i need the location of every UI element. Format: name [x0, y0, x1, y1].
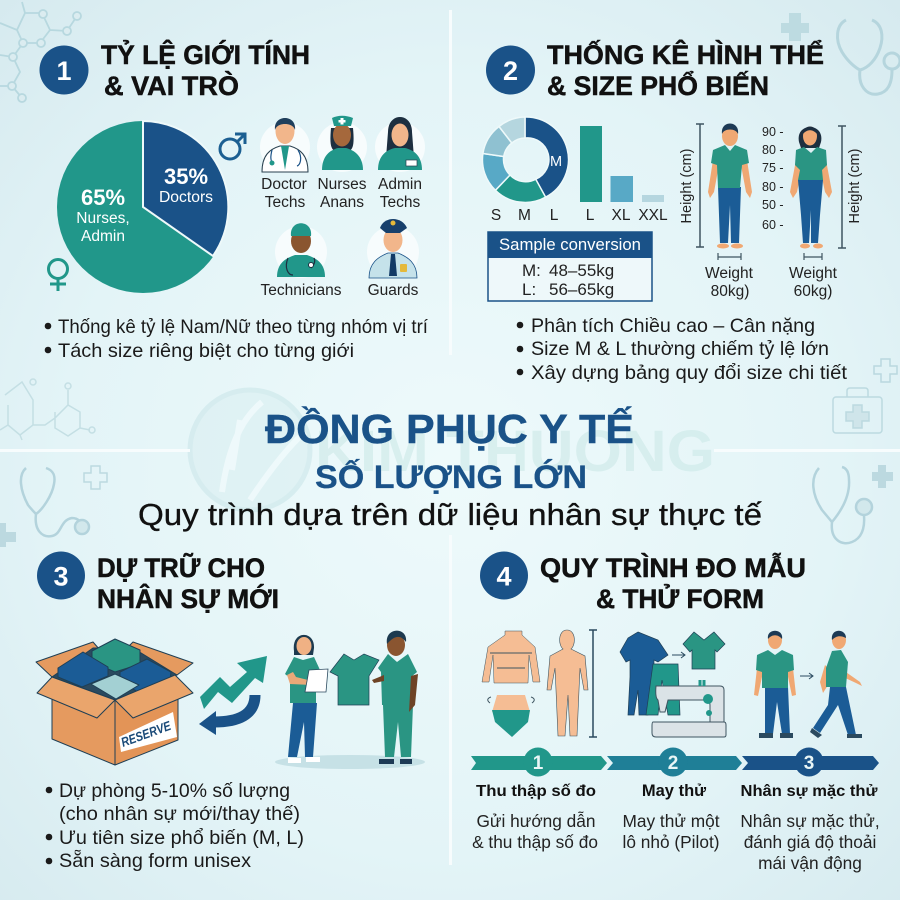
avatar: admin — [375, 117, 425, 211]
donut labels: M — [518, 207, 531, 224]
scale ticks: 50 - — [762, 198, 784, 212]
step 3 text: Nhân sự mặc thử, — [740, 811, 880, 831]
step 2 text: May thử — [642, 782, 706, 800]
scale ticks: 75 - — [762, 161, 784, 175]
donut labels — [491, 207, 559, 224]
bar chart — [580, 126, 668, 224]
avatar: nurse — [317, 116, 367, 211]
badge 1 — [40, 46, 88, 94]
panel 3: reserve for new staff — [36, 552, 425, 872]
bullet list 3: (cho nhân sự mới/thay thế) — [59, 803, 300, 825]
decoration: stethoscope right — [813, 467, 872, 543]
step 2 text: May thử một — [622, 811, 720, 831]
decoration: molecule middle left — [0, 379, 95, 440]
center title block — [138, 406, 762, 532]
heading 2: & SIZE PHỔ BIẾN — [547, 71, 769, 101]
badge 2 — [486, 46, 535, 94]
bar chart: XXL — [638, 207, 668, 224]
bullet list 3 — [46, 780, 304, 872]
sample conversion table: Sample conversion — [499, 235, 641, 254]
pie chart: 35% — [164, 164, 208, 189]
bullet list 3: Dự phòng 5-10% số lượng — [59, 780, 290, 802]
process arrow steps: 3 — [804, 753, 814, 774]
watermark logo: KIM THUONG — [315, 419, 715, 484]
decoration: cross right — [872, 465, 893, 488]
bullet list 2: Xây dựng bảng quy đổi size chi tiết — [531, 362, 848, 384]
arrow: green growth — [200, 656, 267, 709]
avatar: admin: Admin — [378, 176, 422, 193]
decoration: crosses left — [0, 466, 107, 547]
badge 3: 3 — [53, 562, 69, 592]
center title block: SỐ LƯỢNG LỚN — [315, 459, 587, 495]
scale ticks: 60 - — [762, 218, 784, 232]
pie chart: Admin — [81, 228, 125, 245]
avatar: nurse: Nurses — [317, 176, 367, 193]
figure: man with measurements — [679, 124, 754, 300]
heading 1: & VAI TRÒ — [104, 71, 239, 101]
panel 1: gender ratio and roles — [40, 40, 429, 362]
figure: man with measurements: Height (cm) — [679, 149, 695, 223]
step 1 text: Thu thập số đo — [476, 783, 596, 800]
bullet list 3: Ưu tiên size phổ biến (M, L) — [59, 827, 304, 849]
illustration: staff checking shirt — [275, 631, 425, 769]
icon: male symbol — [220, 134, 245, 159]
heading 2: THỐNG KÊ HÌNH THỂ — [547, 40, 824, 70]
step 3 text: Nhân sự mặc thử — [740, 783, 878, 800]
panel 4: measuring and fitting process — [471, 552, 880, 873]
scale ticks: 80 - — [762, 143, 784, 157]
avatar: admin: Techs — [380, 194, 420, 211]
pie chart: Nurses, — [76, 210, 130, 227]
avatar: doctor: Techs — [265, 194, 305, 211]
step 2 text — [622, 782, 720, 852]
decoration: stethoscope top right — [837, 20, 900, 94]
figure: woman with measurements — [789, 126, 863, 300]
badge 4: 4 — [496, 562, 512, 592]
scale ticks — [762, 125, 784, 232]
badge 1: 1 — [56, 56, 72, 86]
icon: female symbol — [48, 260, 68, 291]
figure: man with measurements: 80kg) — [711, 283, 749, 300]
decoration: cross top right — [781, 13, 809, 41]
step 1 text — [472, 783, 598, 852]
decoration: stethoscope left — [21, 468, 89, 536]
icon: reserve box: RESERVE — [119, 718, 173, 750]
center title block: ĐỒNG PHỤC Y TẾ — [265, 406, 634, 452]
bar chart: XL — [612, 207, 631, 224]
figure: man with measurements: Weight — [705, 265, 754, 282]
step 3 text: đánh giá độ thoải — [744, 832, 876, 852]
panel 2: body statistics and sizes — [482, 40, 863, 384]
donut labels: L — [550, 207, 559, 224]
figure: woman with measurements: Height (cm) — [847, 149, 863, 223]
bullet list 1: Thống kê tỷ lệ Nam/Nữ theo từng nhóm vị trí — [58, 316, 429, 338]
sample conversion table: M: — [522, 261, 541, 280]
heading 3 — [97, 553, 279, 614]
pie chart: 65% — [81, 185, 125, 210]
bar chart: L — [586, 207, 595, 224]
bullet list 2: Phân tích Chiều cao – Cân nặng — [531, 315, 815, 337]
heading 4 — [540, 553, 806, 614]
bullet list 2: Size M & L thường chiếm tỷ lệ lớn — [531, 338, 829, 360]
heading 2 — [547, 40, 824, 101]
heading 3: DỰ TRỮ CHO — [97, 553, 265, 583]
avatar: technician — [260, 223, 342, 299]
heading 1 — [101, 40, 310, 101]
pie chart — [57, 121, 229, 293]
heading 4: & THỬ FORM — [596, 584, 764, 614]
pie chart: Doctors — [159, 189, 213, 206]
bullet list 2 — [517, 315, 848, 384]
scale ticks: 90 - — [762, 125, 784, 139]
avatar: doctor — [260, 118, 310, 211]
donut labels: S — [491, 207, 501, 224]
sample conversion table: 56–65kg — [549, 280, 614, 299]
badge 4 — [480, 552, 528, 600]
donut chart — [482, 117, 569, 202]
avatar: guard: Guards — [368, 282, 419, 299]
heading 4: QUY TRÌNH ĐO MẪU — [540, 553, 806, 583]
arrow: blue return — [199, 695, 255, 735]
avatar: doctor: Doctor — [261, 176, 307, 193]
figure: woman with measurements: 60kg) — [794, 283, 832, 300]
badge 2: 2 — [503, 56, 518, 86]
bullet list 1: Tách size riêng biệt cho từng giới — [58, 340, 354, 362]
badge 3 — [37, 552, 85, 600]
step 1 text: & thu thập số đo — [472, 832, 598, 852]
avatar: guard — [367, 219, 419, 299]
icon: reserve box — [36, 639, 193, 765]
process arrow steps — [471, 748, 879, 776]
figure: woman with measurements: Weight — [789, 265, 838, 282]
decoration: molecule top left — [0, 2, 81, 102]
watermark logo — [190, 390, 715, 510]
step 3 text: mái vận động — [758, 853, 862, 873]
step 3 text — [740, 783, 880, 873]
decoration: first aid kit — [833, 388, 882, 433]
decoration: outlined cross right — [874, 359, 897, 382]
illustration: body measuring — [482, 630, 597, 737]
donut chart: M — [550, 154, 562, 170]
illustration: staff fitting — [754, 631, 862, 738]
heading 3: NHÂN SỰ MỚI — [97, 584, 279, 614]
scale ticks: 80 - — [762, 180, 784, 194]
bullet list 3: Sẵn sàng form unisex — [59, 849, 251, 872]
process arrow steps: 1 — [533, 753, 544, 774]
step 2 text: lô nhỏ (Pilot) — [622, 832, 720, 852]
center title block: Quy trình dựa trên dữ liệu nhân sự thực tế — [138, 497, 762, 532]
sample conversion table — [488, 232, 652, 301]
sample conversion table: L: — [522, 280, 536, 299]
process arrow steps: 2 — [668, 753, 678, 774]
sample conversion table: 48–55kg — [549, 261, 614, 280]
illustration: sewing sample — [620, 632, 726, 737]
step 1 text: Gửi hướng dẫn — [476, 811, 596, 831]
bullet list 1 — [45, 316, 429, 362]
heading 1: TỶ LỆ GIỚI TÍNH — [101, 40, 310, 70]
avatar: technician: Technicians — [260, 282, 342, 299]
avatar: nurse: Anans — [320, 194, 364, 211]
